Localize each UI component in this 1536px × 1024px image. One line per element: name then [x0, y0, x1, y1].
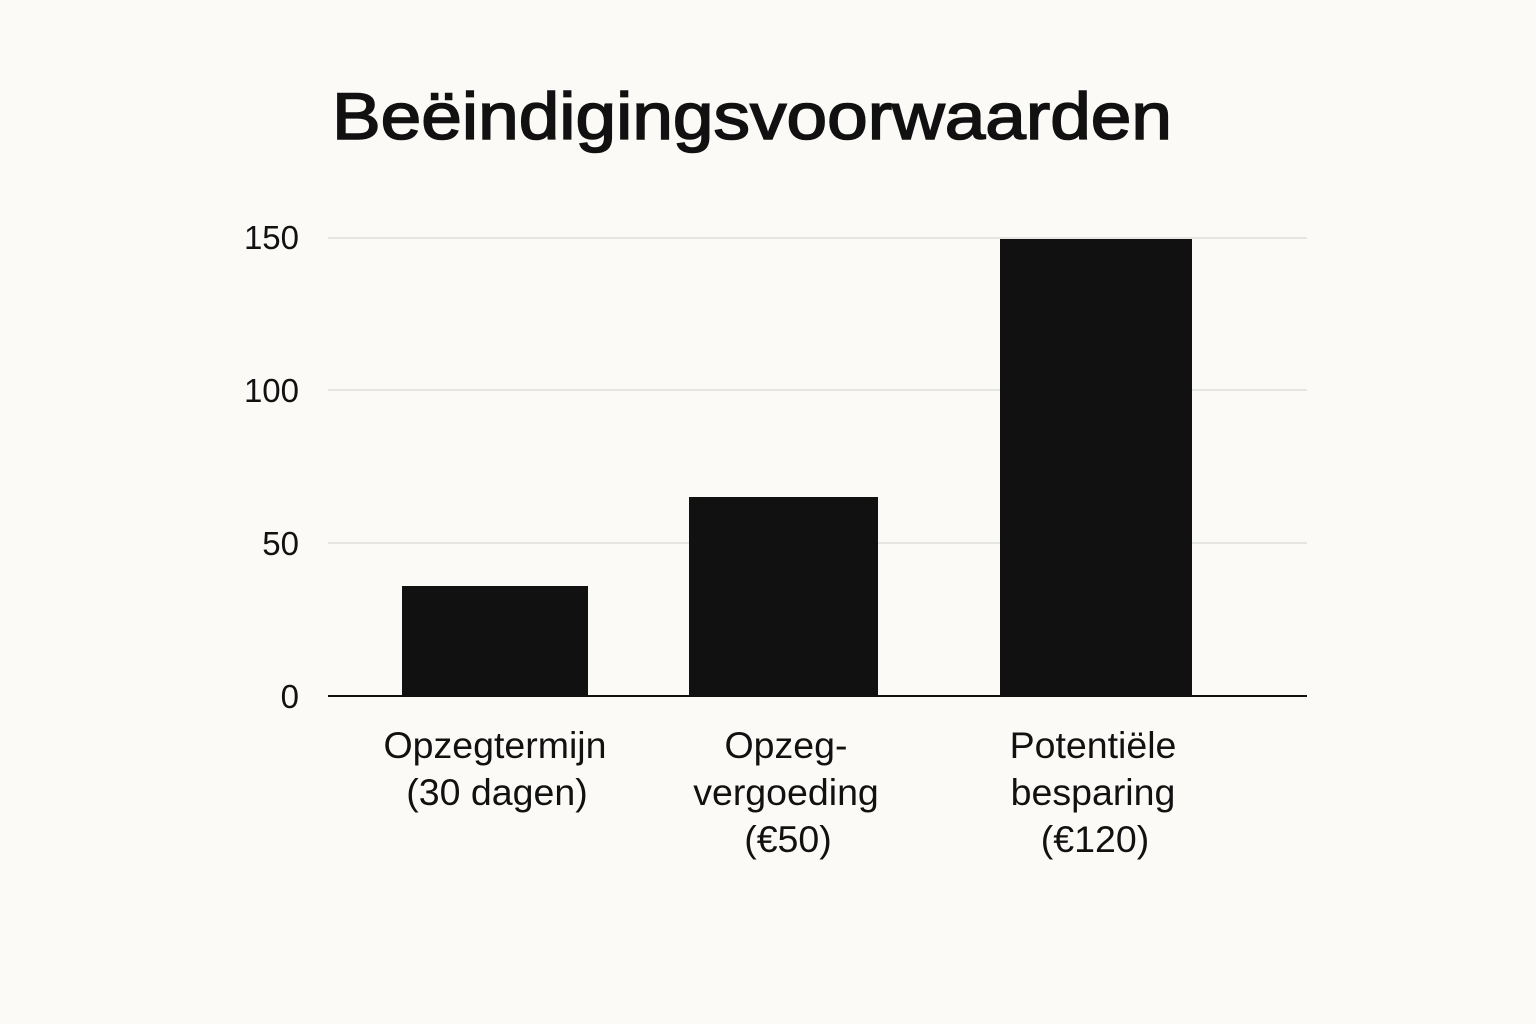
- x axis labels: (30 dagen): [406, 771, 588, 813]
- x axis labels: vergoeding: [693, 771, 879, 813]
- bar chart: [402, 239, 1192, 696]
- y axis labels: 0: [281, 678, 299, 715]
- bar: Potentiële besparing: [1000, 239, 1192, 696]
- x axis labels: Potentiële: [1010, 724, 1176, 766]
- y axis labels: 100: [244, 372, 299, 409]
- y axis labels: [244, 219, 299, 715]
- bar: Opzegtermijn: [402, 586, 588, 696]
- bar: Opzegvergoeding: [689, 497, 878, 696]
- x axis labels: (€120): [1041, 818, 1149, 860]
- x axis labels: (€50): [744, 818, 832, 860]
- y axis labels: 50: [262, 525, 299, 562]
- title: Beëindigingsvoorwaarden: [332, 79, 1172, 153]
- y axis labels: 150: [244, 219, 299, 256]
- x axis labels: [383, 724, 1176, 860]
- x axis labels: besparing: [1011, 771, 1175, 813]
- x axis labels: Opzegtermijn: [383, 724, 607, 766]
- x axis labels: Opzeg-: [725, 724, 847, 766]
